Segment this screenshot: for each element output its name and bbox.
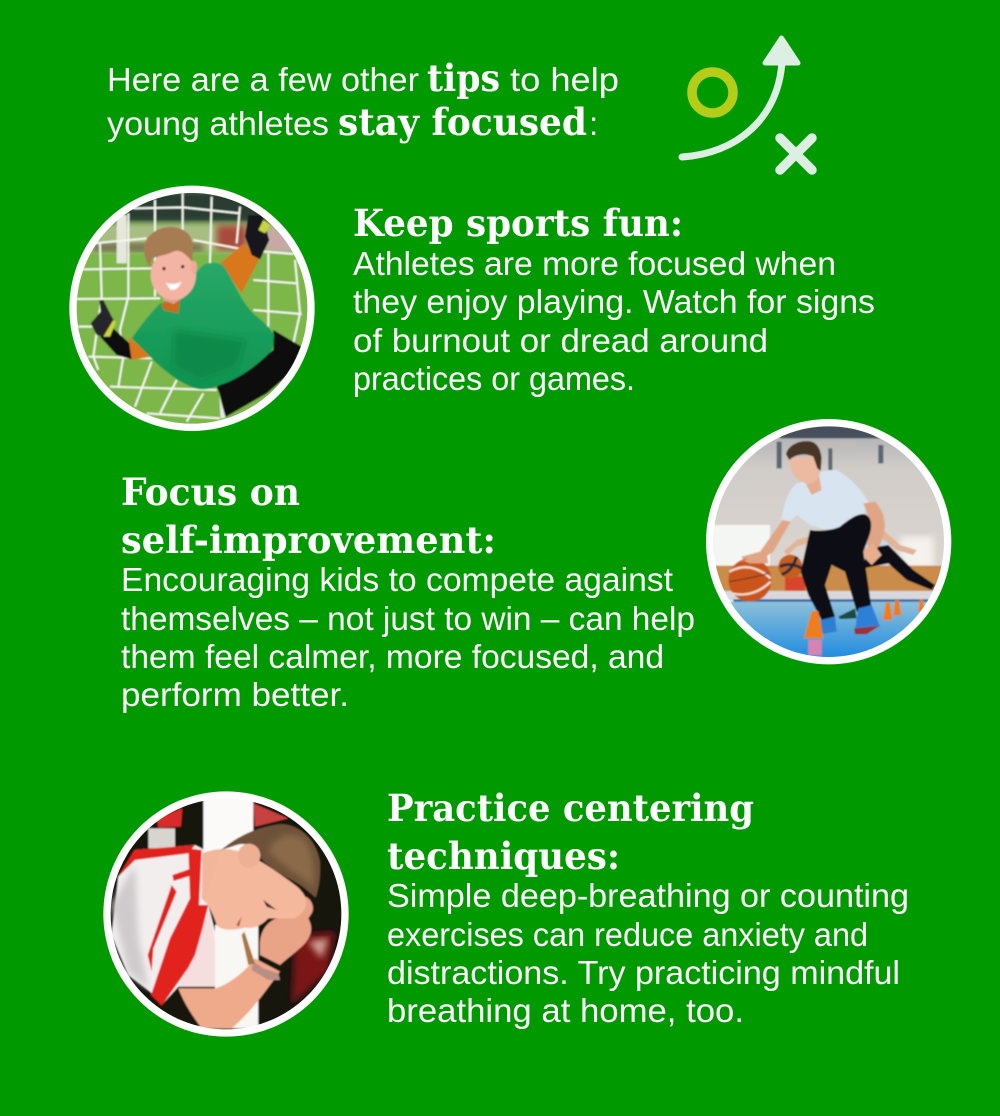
shirt [112,845,215,1005]
heading: focus on self-improvement: Focus on [121,470,300,514]
intro heading line 1: tips [427,56,500,100]
body text: self-improvement: themselves – not just to win – can help [121,600,695,637]
arm [178,958,280,1028]
body text: centering techniques: Simple deep-breathing or counting [387,877,909,914]
intro heading line 2: stay focused [338,100,587,144]
heading: practice centering techniques [387,786,754,878]
body text: keep sports fun: practices or games. [353,360,635,397]
second player [783,536,810,556]
body text: centering techniques: exercises can reduce anxiety and [387,916,868,953]
body text: centering techniques: breathing at home, too. [387,992,744,1029]
basketball [728,558,772,602]
photo: young goalkeeper [69,186,315,431]
sleeves and gloves [220,243,259,293]
neck and head [806,476,822,496]
heading: focus on self-improvement: self-improvement: [121,518,496,562]
face and hair [162,296,186,305]
photo: athlete with head in hand [103,791,349,1037]
icon: game play diagram [682,38,812,170]
body text: self-improvement [121,561,695,713]
header [107,56,619,144]
intro heading line 1: Here are a few other [107,61,419,98]
body text: self-improvement: perform better. [121,676,349,713]
body text: keep sports fun: Athletes are more focused when [353,245,836,282]
intro heading line 1: to help [510,61,619,98]
intro heading line 2: : [589,105,598,142]
body text: keep sports fun: of burnout or dread around [353,322,768,359]
hair and ear [221,824,320,898]
body text: self-improvement: them feel calmer, more focused, and [121,638,664,675]
body text: centering techniques: distractions. Try practicing mindful [387,954,900,991]
heading: practice centering techniques: techniques: [387,834,620,878]
body text: centering techniques [387,877,909,1029]
intro heading line 2: young athletes [107,105,329,142]
net [77,193,302,422]
cones [804,611,823,638]
heading: practice centering techniques: Practice centering [387,786,754,830]
photo: boy dribbling basketball [706,419,951,664]
heading: focus on self-improvement [121,470,496,562]
body text: keep sports fun [353,245,875,397]
body text: self-improvement: Encouraging kids to compete against [121,561,673,598]
panel: practice centering techniques [103,786,909,1037]
jersey [132,263,274,389]
boy [782,470,868,530]
heading: keep sports fun: Keep sports fun: [353,201,683,245]
neck and face [201,848,222,904]
shorts [217,330,302,417]
body text: keep sports fun: they enjoy playing. Watch for signs [353,283,875,320]
panel: keep sports fun [69,186,875,431]
shoes [821,617,837,634]
panel: focus on self-improvement [121,419,951,713]
